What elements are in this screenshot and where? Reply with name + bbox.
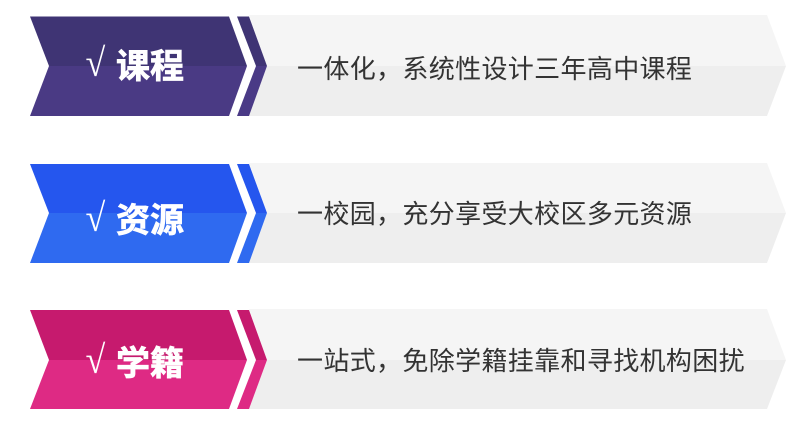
main chevron bbox=[30, 164, 247, 263]
row: 课程 bbox=[30, 15, 786, 116]
check mark: √ bbox=[86, 196, 105, 240]
chevron accent bbox=[237, 16, 267, 116]
row: 资源 bbox=[30, 163, 786, 263]
check mark: √ bbox=[86, 338, 105, 382]
description: 一体化，系统性设计三年高中课程 bbox=[297, 54, 692, 84]
text panel bbox=[249, 309, 786, 409]
description: 一校园，充分享受大校区多元资源 bbox=[297, 199, 692, 229]
chevron accent bbox=[237, 310, 267, 409]
heading: 资源 bbox=[116, 202, 184, 240]
heading: 课程 bbox=[116, 48, 184, 86]
description: 一站式，免除学籍挂靠和寻找机构困扰 bbox=[297, 346, 745, 376]
check mark: √ bbox=[86, 41, 105, 85]
text panel bbox=[249, 163, 786, 263]
heading: 学籍 bbox=[116, 345, 184, 383]
chevron accent bbox=[237, 164, 267, 263]
text panel bbox=[249, 15, 786, 116]
row: 学籍 bbox=[30, 309, 786, 409]
main chevron bbox=[30, 310, 247, 409]
main chevron bbox=[30, 16, 247, 116]
